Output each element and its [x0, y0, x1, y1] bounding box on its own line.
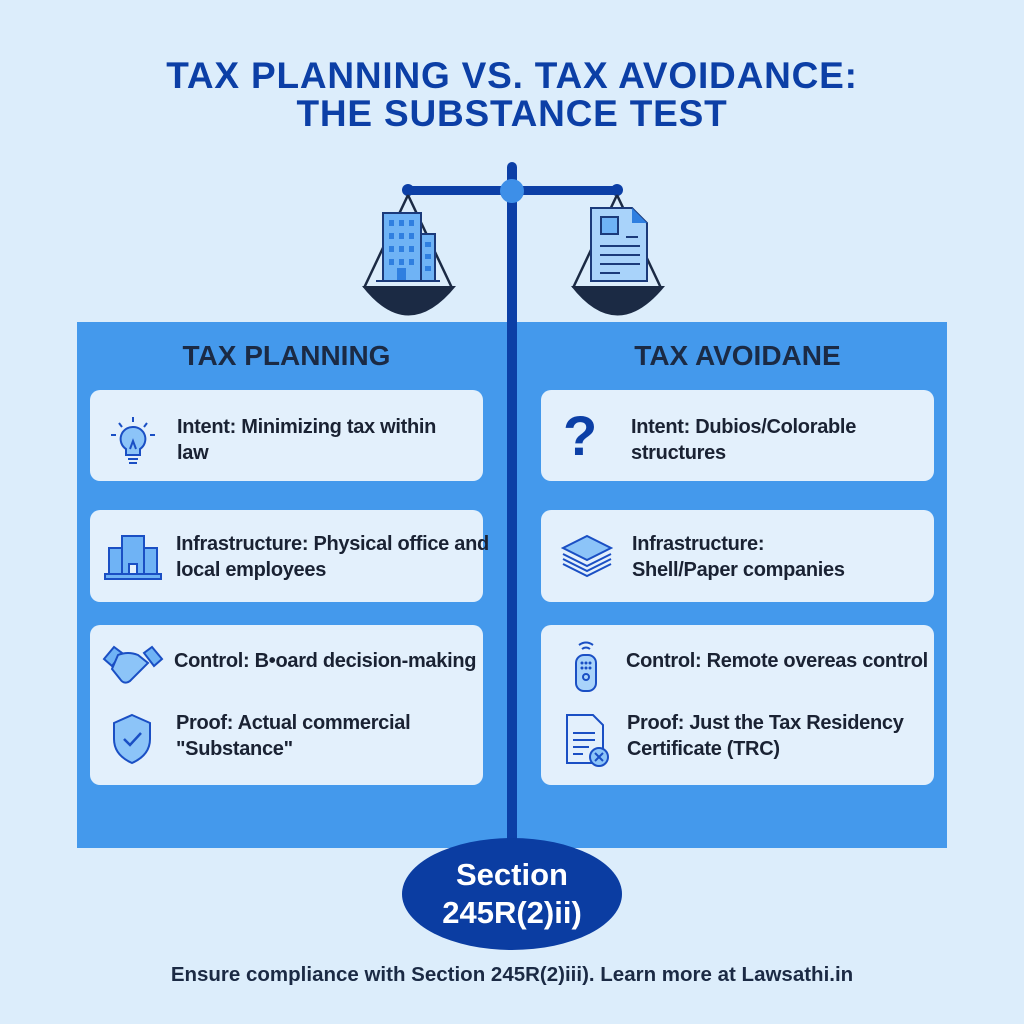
text: Infrastructure: [632, 533, 764, 555]
section badge [402, 838, 622, 950]
heading: tax avoidance: TAX AVOIDANE [634, 340, 841, 371]
icon: layered papers [561, 534, 613, 578]
text: structures [631, 442, 726, 464]
card: intent (avoidance) [541, 390, 934, 481]
text: proof: Proof: Just the Tax Residency [627, 712, 904, 734]
text: Intent: Minimizing tax within [177, 416, 436, 438]
text: control: Control: Remote overeas control [626, 650, 928, 672]
text [177, 416, 436, 464]
icon: office building [104, 535, 162, 580]
text: control: Control: B•oard decision-making [174, 650, 476, 672]
text: proof: "Substance" [176, 738, 293, 760]
icon: remote control [575, 642, 597, 692]
text: law [177, 442, 208, 464]
text: proof: Certificate (TRC) [627, 738, 780, 760]
scale beam [402, 179, 623, 203]
heading: tax planning: TAX PLANNING [183, 340, 390, 371]
card: infrastructure (planning) [90, 510, 483, 602]
scale pole [507, 162, 517, 862]
text: Intent: Dubios/Colorable [631, 416, 856, 438]
title [166, 55, 858, 134]
text [176, 533, 489, 581]
card: infrastructure (avoidance) [541, 510, 934, 602]
icon: handshake [102, 646, 164, 684]
section badge: 245R(2)ii) [442, 895, 582, 930]
card: intent (planning) [90, 390, 483, 481]
footer text: Ensure compliance with Section 245R(2)iii). Learn more at Lawsathi.in [171, 963, 853, 986]
text: proof [176, 712, 410, 760]
icon: question mark: ? [563, 404, 597, 467]
card: control & proof (planning) [90, 625, 483, 785]
title: THE SUBSTANCE TEST [296, 93, 728, 134]
icon: certificate with x [566, 714, 609, 767]
title: TAX PLANNING VS. TAX AVOIDANCE: [166, 55, 858, 96]
right pan with document [571, 195, 665, 316]
left pan with building [362, 195, 456, 316]
text: Infrastructure: Physical office and [176, 533, 489, 555]
card: control & proof (avoidance) [541, 625, 934, 785]
section badge: Section [456, 857, 568, 892]
icon: shield [113, 714, 151, 764]
text [631, 416, 856, 464]
text: proof: Proof: Actual commercial [176, 712, 410, 734]
icon: lightbulb [111, 417, 155, 464]
panel: comparison background [77, 322, 947, 848]
text: local employees [176, 559, 326, 581]
text [632, 533, 845, 581]
text: proof [627, 712, 904, 760]
text: Shell/Paper companies [632, 559, 845, 581]
